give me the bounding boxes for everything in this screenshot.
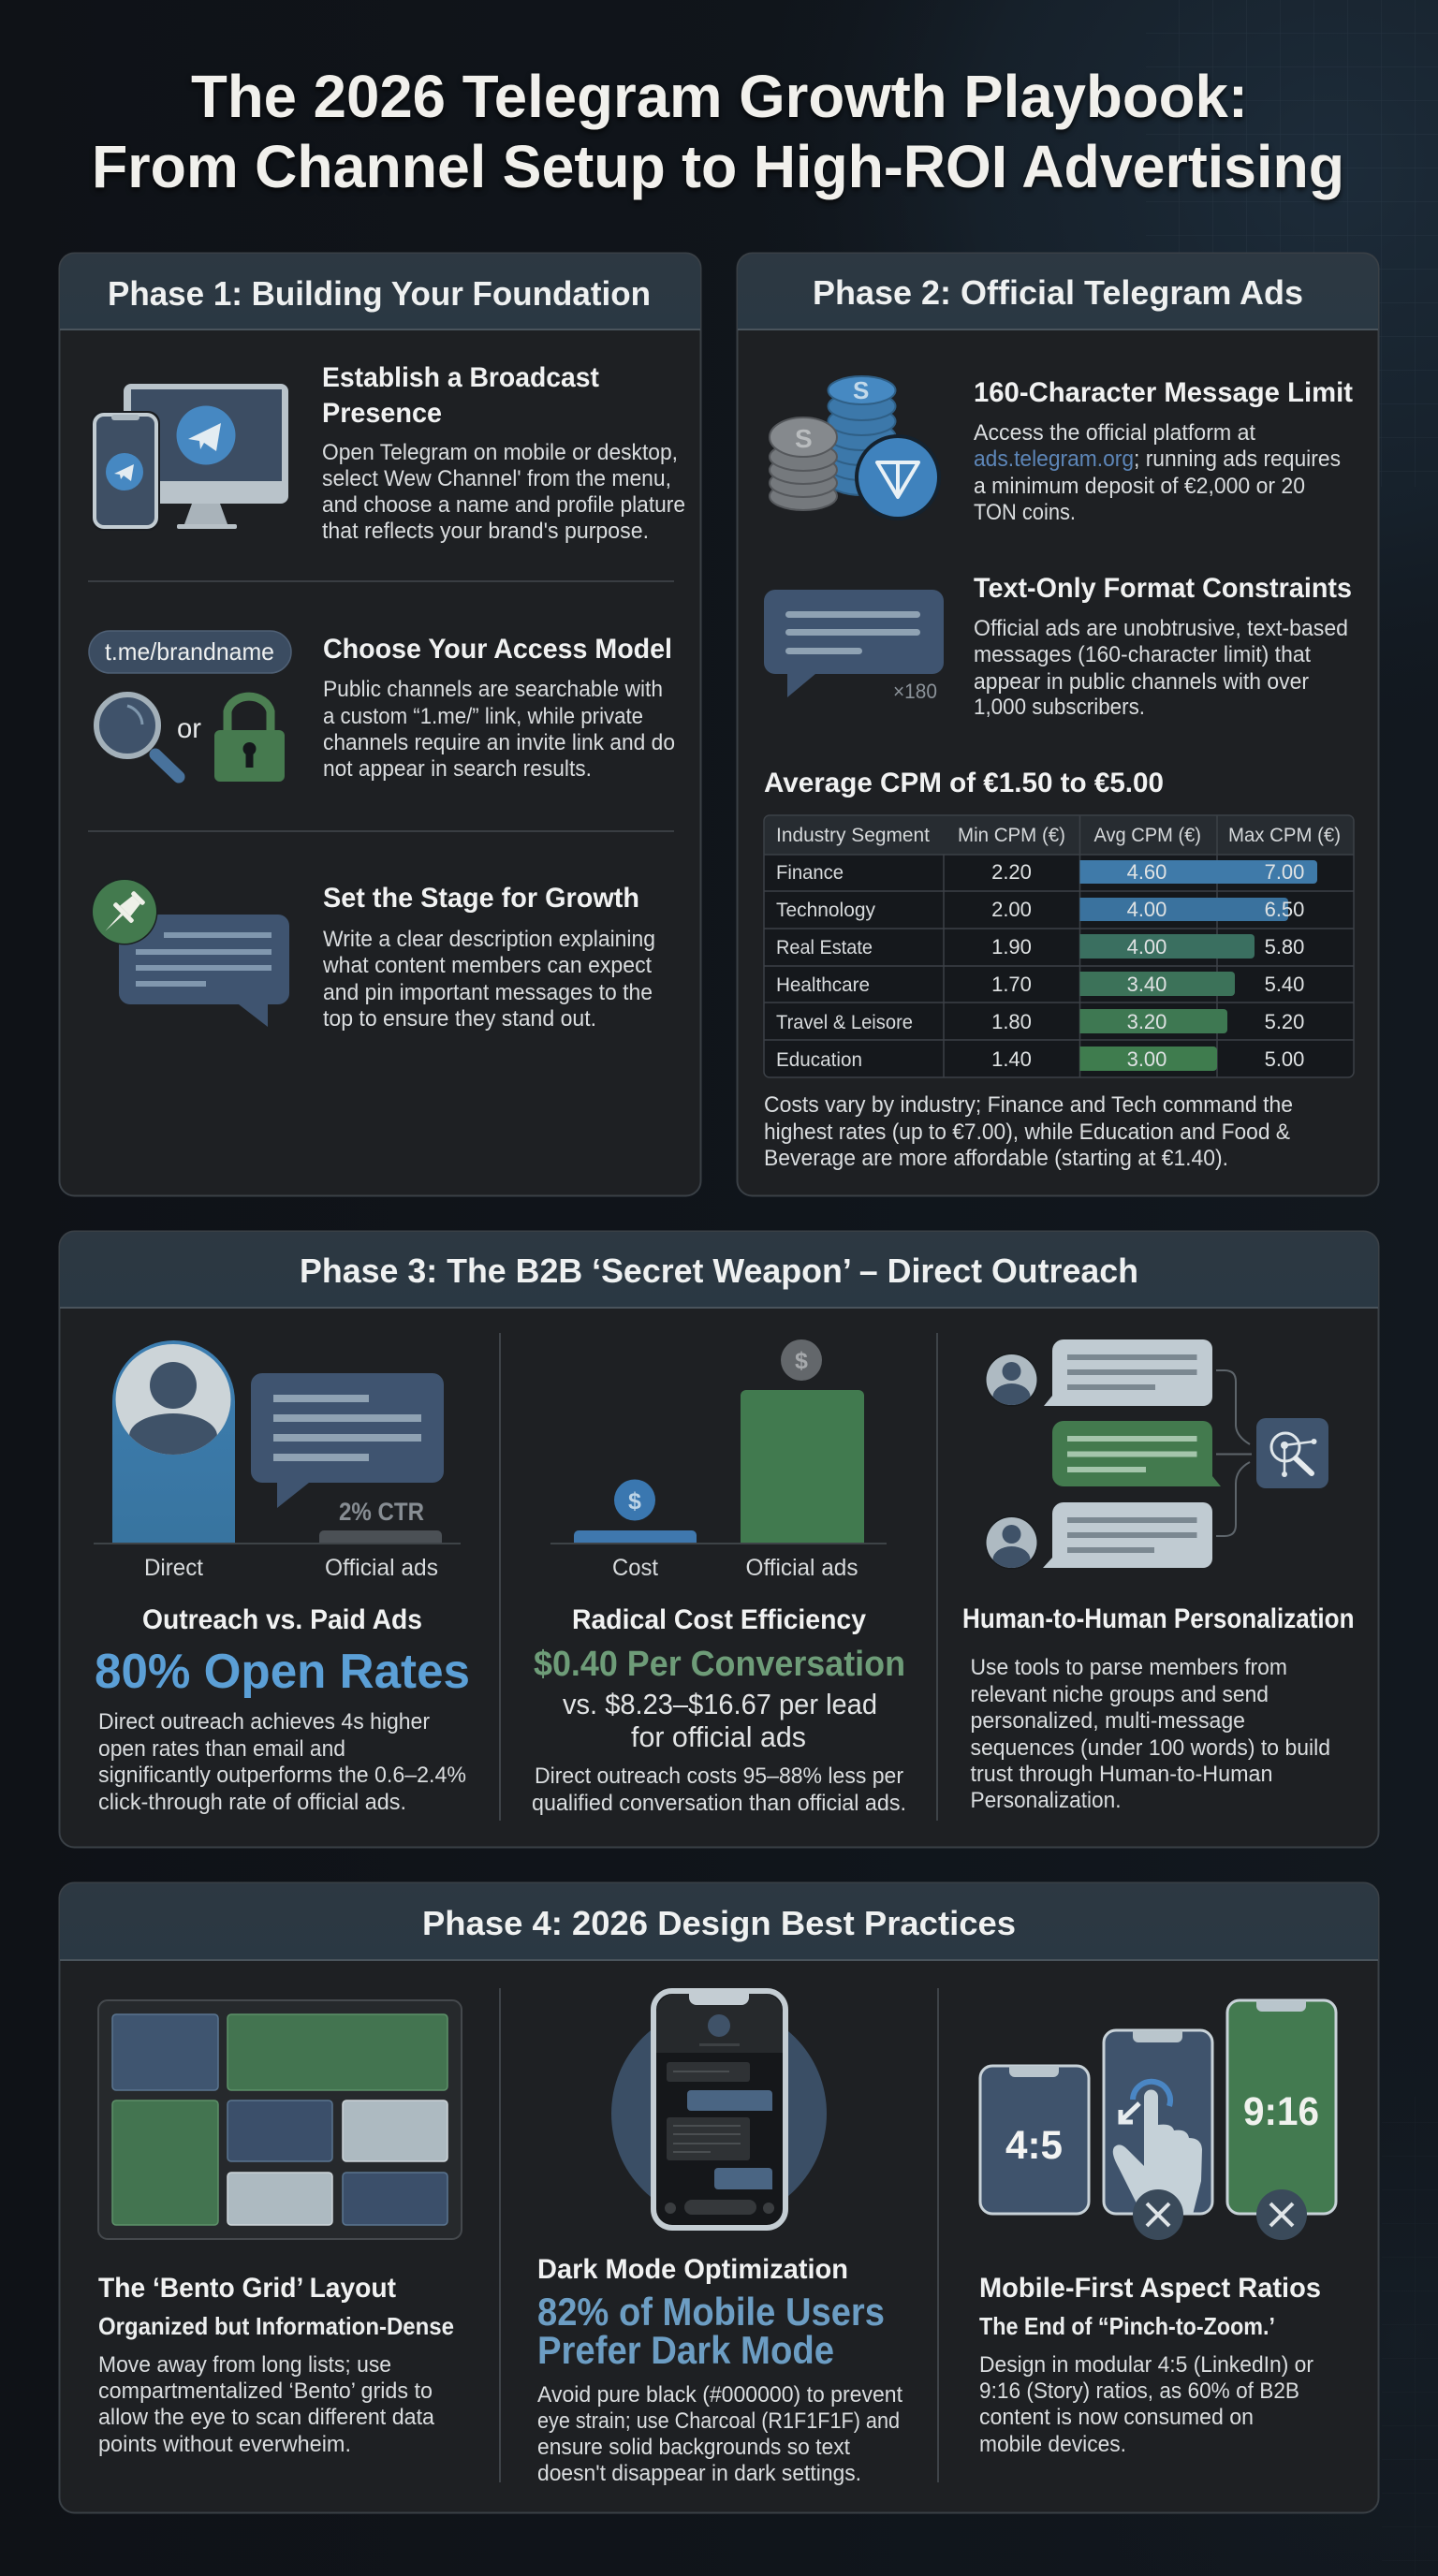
text: Human-to-Human Personalization: personalized, multi-message [970,1708,1245,1734]
table: CPM by industry [764,815,1354,1077]
text: Human-to-Human Personalization: trust through Human-to-Human [970,1762,1273,1787]
text: Dark Mode Optimization: Prefer Dark Mode [537,2328,834,2372]
text: 160-Character Message Limit: 160-Character Message Limit [974,377,1353,408]
table: CPM by industry: 6.50 [1265,898,1304,921]
text: 160-Character Message Limit: Access the official platform at [974,420,1255,446]
panel header: Phase 1 [60,254,700,329]
table: CPM by industry: 5.80 [1265,935,1304,959]
text: Choose Your Access Model [323,634,675,782]
text: Mobile-First Aspect Ratios: 9:16 (Story) ratios, as 60% of B2B [979,2378,1299,2404]
text: Text-Only Format Constraints: messages (160-character limit) that [974,642,1311,667]
text: Set the Stage for Growth: top to ensure they stand out. [323,1006,596,1032]
text: The Bento Grid Layout [98,2273,454,2457]
panel header: Phase 2 [738,254,1378,329]
table: CPM by industry: Min CPM (€) [958,825,1065,846]
text: Mobile-First Aspect Ratios: Mobile-First Aspect Ratios [979,2273,1321,2304]
panel: Phase 1 [60,253,700,1196]
table: CPM by industry: Finance [776,862,844,884]
text: Choose Your Access Model: a custom “1.me/” link, while private [323,704,643,729]
text: Radical Cost Efficiency: $0.40 Per Conversation [534,1645,905,1684]
text: Radical Cost Efficiency [532,1604,906,1816]
text: Human-to-Human Personalization: relevant niche groups and send [970,1682,1269,1707]
text: The Bento Grid Layout: Organized but Information-Dense [98,2312,454,2340]
text: Outreach vs. Paid Ads: Direct outreach achieves 4s higher [98,1709,430,1734]
text: The Bento Grid Layout: The ‘Bento Grid’ Layout [98,2273,396,2304]
table: CPM by industry: 4.00 [1127,898,1167,921]
text: Establish a Broadcast Presence: Open Telegram on mobile or desktop, [322,440,678,465]
text: Dark Mode Optimization: 82% of Mobile Users [537,2290,885,2334]
text: Radical Cost Efficiency: Direct outreach costs 95–88% less per [535,1764,903,1789]
text: Text-Only Format Constraints: appear in public channels with over [974,669,1309,695]
text: Human-to-Human Personalization: Use tools to parse members from [970,1655,1287,1680]
text: Dark Mode Optimization: eye strain; use Charcoal (R1F1F1F) and [537,2408,900,2434]
text: Human-to-Human Personalization [962,1603,1354,1813]
table: CPM by industry: 4.00 [1127,935,1167,959]
text: Choose Your Access Model: channels require an invite link and do [323,730,675,755]
text: Radical Cost Efficiency: vs. $8.23–$16.67 per lead [563,1688,877,1720]
text: Human-to-Human Personalization: Human-to-Human Personalization [962,1603,1354,1634]
text: Dark Mode Optimization: Avoid pure black (#000000) to prevent [537,2382,902,2408]
text: Set the Stage for Growth: Write a clear description explaining [323,927,655,952]
text: Outreach vs. Paid Ads: significantly outperforms the 0.6–2.4% [98,1763,466,1788]
table: CPM by industry: 3.00 [1127,1047,1167,1071]
title: From Channel Setup to High-ROI Advertising [92,133,1344,200]
text: Dark Mode Optimization: ensure solid backgrounds so text [537,2435,850,2460]
text: Outreach vs. Paid Ads [95,1604,470,1815]
table: CPM by industry: 1.70 [991,973,1032,996]
text: Human-to-Human Personalization: Personalization. [970,1788,1122,1813]
text: Set the Stage for Growth: what content members can expect [322,953,652,978]
text: Establish a Broadcast Presence: Establish a Broadcast [322,362,599,393]
text: cost note: highest rates (up to €7.00), while Education and Food & [764,1120,1290,1145]
title: The 2026 Telegram Growth Playbook: [191,63,1248,130]
table: CPM by industry: Industry Segment [776,825,930,846]
text: Set the Stage for Growth: Set the Stage for Growth [323,883,639,914]
text: 160-Character Message Limit [974,377,1353,525]
table: CPM by industry: 1.80 [991,1010,1032,1033]
text: cost note: Beverage are more affordable (starting at €1.40). [764,1146,1228,1171]
icon: t.me link, search or lock: or [177,713,201,744]
text: 160-Character Message Limit: a minimum deposit of €2,000 or 20 [974,474,1305,499]
table: CPM by industry: 1.90 [991,935,1032,959]
text: Outreach vs. Paid Ads: 80% Open Rates [95,1645,470,1699]
table: CPM by industry: Avg CPM (€) [1093,825,1201,846]
panel header: Phase 1: Phase 1: Building Your Foundation [108,274,651,313]
table: CPM by industry: Healthcare [776,974,870,996]
text: Radical Cost Efficiency: Radical Cost Efficiency [572,1604,866,1635]
text: Human-to-Human Personalization: sequences (under 100 words) to build [970,1735,1330,1761]
table: CPM by industry: 3.40 [1127,973,1167,996]
text: Radical Cost Efficiency: for official ads [631,1720,806,1753]
chart: cost direct vs official ads: $ [628,1488,641,1515]
table: CPM by industry: Education [776,1049,862,1071]
chart: cost direct vs official ads: Cost [612,1555,658,1581]
icon: coin stacks and TON [770,376,941,520]
bars: average CPM [1080,860,1317,1071]
text: Choose Your Access Model: Public channels are searchable with [323,677,663,702]
diagram: personalized message sequence [985,1339,1328,1573]
icon: text ad bubble [764,590,944,703]
text: Text-Only Format Constraints: 1,000 subscribers. [974,695,1145,720]
panel header: Phase 4 [60,1883,1378,1960]
text: Establish a Broadcast Presence: and choose a name and profile plature [322,492,685,518]
table: CPM by industry: 7.00 [1265,860,1304,884]
table: CPM by industry: 4.60 [1127,860,1167,884]
chart: open rates direct vs official ads: 2% CTR [339,1498,424,1526]
panel header: Phase 2: Phase 2: Official Telegram Ads [813,273,1303,312]
chart: open rates direct vs official ads: Direct [144,1555,203,1581]
panel header: Phase 4: Phase 4: 2026 Design Best Practices [422,1904,1016,1942]
chart: open rates direct vs official ads [94,1340,461,1581]
text: Choose Your Access Model: not appear in search results. [323,756,592,782]
text: Dark Mode Optimization: Dark Mode Optimization [537,2254,848,2285]
text: Text-Only Format Constraints [974,573,1352,720]
text: The Bento Grid Layout: points without everwheim. [98,2432,351,2457]
text: Radical Cost Efficiency: qualified conversation than official ads. [532,1791,906,1816]
text: Set the Stage for Growth: and pin important messages to the [323,980,653,1005]
icon: coin stacks and TON: S [795,424,813,453]
table: CPM by industry: 5.00 [1265,1047,1304,1071]
text: Establish a Broadcast Presence: that reflects your brand's purpose. [322,519,649,544]
table: CPM by industry: Travel & Leisore [776,1012,913,1033]
text: Dark Mode Optimization [537,2254,902,2486]
text: cost note: Costs vary by industry; Finance and Tech command the [764,1092,1293,1118]
text: The Bento Grid Layout: allow the eye to scan different data [98,2405,435,2430]
panel: Phase 4 [60,1883,1378,2512]
text: Establish a Broadcast Presence: Presence [322,398,442,429]
icon: aspect ratio phones and pinch gesture: 4:5 [1005,2123,1063,2168]
table: CPM by industry: Max CPM (€) [1228,825,1341,846]
icon: aspect ratio phones and pinch gesture: 9:16 [1243,2089,1319,2134]
text: The Bento Grid Layout: compartmentalized ‘Bento’ grids to [98,2378,433,2404]
text: Mobile-First Aspect Ratios: Design in modular 4:5 (LinkedIn) or [979,2352,1313,2378]
text: Mobile-First Aspect Ratios: content is now consumed on [979,2405,1254,2430]
text: Choose Your Access Model: Choose Your Access Model [323,634,672,665]
icon: aspect ratio phones and pinch gesture [980,2000,1336,2240]
chart: open rates direct vs official ads: Official ads [325,1555,438,1581]
text: Outreach vs. Paid Ads: click-through rate of official ads. [98,1790,406,1815]
text: cost note [764,1092,1293,1171]
panel header: Phase 3: Phase 3: The B2B ‘Secret Weapon’ – Direct Outreach [300,1251,1138,1290]
text: Establish a Broadcast Presence [322,362,685,544]
icon: bento grid [98,2000,462,2239]
table: CPM by industry: 5.20 [1265,1010,1304,1033]
icon: t.me link, search or lock: t.me/brandname [105,637,274,666]
text: The Bento Grid Layout: Move away from long lists; use [98,2352,391,2378]
chart: cost direct vs official ads: Official ads [745,1555,858,1581]
icon: phone in dark mode [611,1990,827,2228]
table: CPM by industry: Technology [776,900,875,921]
text: Text-Only Format Constraints: Text-Only Format Constraints [974,573,1352,604]
title [92,63,1344,200]
text: Outreach vs. Paid Ads: open rates than email and [98,1736,345,1762]
table: CPM by industry: Real Estate [776,937,873,959]
chart: cost direct vs official ads [550,1339,887,1581]
text: 160-Character Message Limit: ads.telegram.org [974,446,1134,472]
icon: monitor and phone with Telegram [91,384,288,531]
icon: coin stacks and TON: S [853,376,869,404]
table: CPM by industry: 2.20 [991,860,1032,884]
icon: text ad bubble: ×180 [893,680,937,703]
table: CPM by industry: 1.40 [991,1047,1032,1071]
text: Outreach vs. Paid Ads: Outreach vs. Paid Ads [142,1604,422,1635]
panel: Phase 3 [60,1232,1378,1848]
text: Establish a Broadcast Presence: select Wew Channel' from the menu, [322,466,671,491]
icon: pinned message bubble [92,878,289,1027]
panel header: Phase 3 [60,1232,1378,1308]
text: Set the Stage for Growth [322,883,655,1032]
text: Text-Only Format Constraints: Official ads are unobtrusive, text-based [974,616,1348,641]
panel: Phase 2 [738,253,1378,1196]
text: Mobile-First Aspect Ratios: mobile devices. [979,2432,1126,2457]
text: 160-Character Message Limit: TON coins. [974,500,1076,525]
chart: cost direct vs official ads: $ [795,1348,808,1374]
icon: t.me link, search or lock [89,631,291,782]
text: Mobile-First Aspect Ratios: The End of “Pinch-to-Zoom.’ [979,2312,1275,2340]
table: CPM by industry: 5.40 [1265,973,1304,996]
text: 160-Character Message Limit: ; running ads requires [1134,446,1341,472]
heading: Average CPM: Average CPM of €1.50 to €5.00 [764,768,1164,798]
table: CPM by industry: 3.20 [1127,1010,1167,1033]
table: CPM by industry: 2.00 [991,898,1032,921]
text: Dark Mode Optimization: doesn't disappear in dark settings. [537,2461,861,2486]
text: Mobile-First Aspect Ratios [979,2273,1321,2457]
